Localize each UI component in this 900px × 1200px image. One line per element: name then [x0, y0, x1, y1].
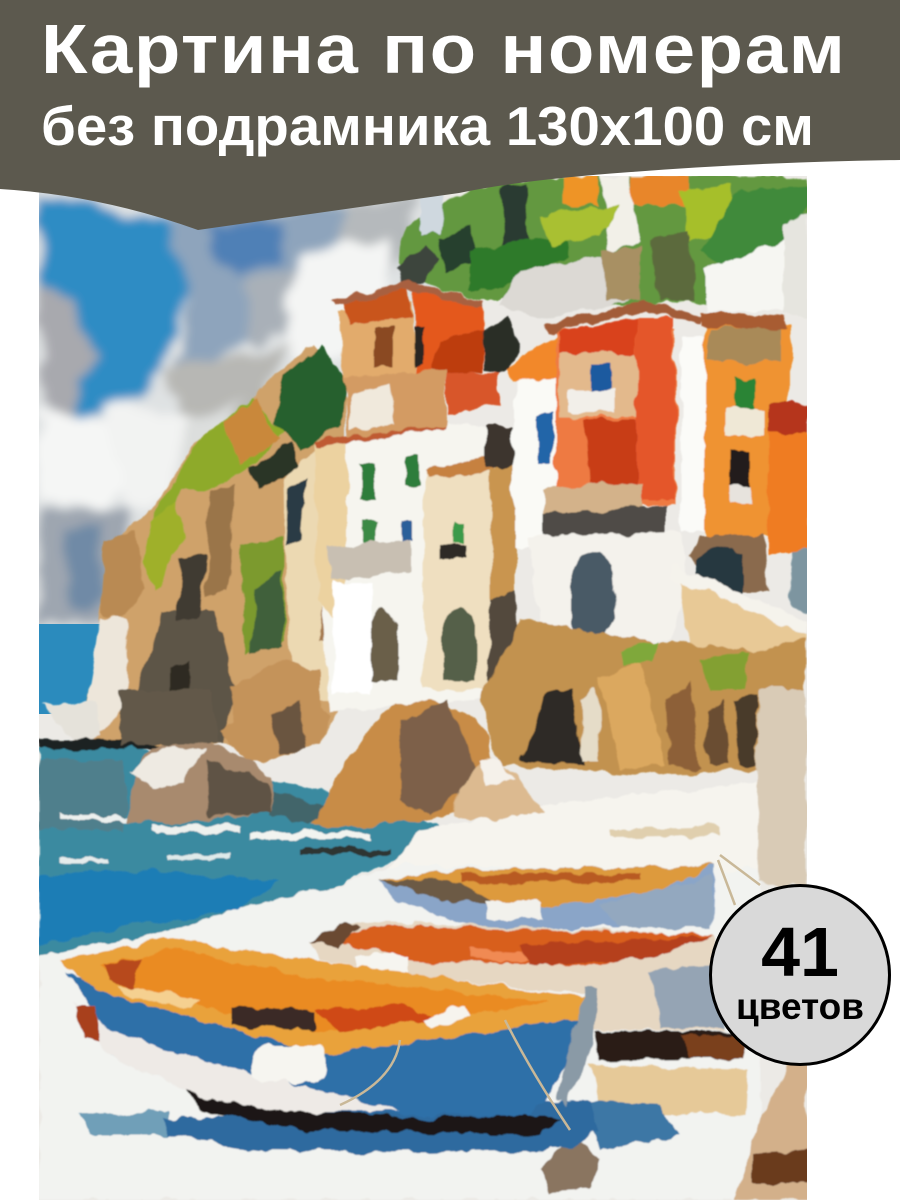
mooring ropes: [340, 855, 760, 1130]
beach: [39, 688, 807, 1200]
text: Картина по номерам: [41, 10, 846, 88]
boat: middle: [308, 921, 742, 1060]
sky: [39, 192, 434, 624]
badge caption: цветов: [736, 986, 864, 1027]
shadow under front boat: [165, 1080, 600, 1152]
distant sea: [39, 624, 100, 714]
boat: front large: [61, 938, 597, 1118]
boat: back: [382, 866, 715, 928]
lower cliff rocks: [40, 620, 807, 775]
badge number: 41: [761, 913, 839, 991]
white buildings: [313, 421, 520, 712]
orange upper tower: [333, 282, 520, 468]
trees at top: [397, 176, 807, 320]
header banner: [0, 0, 900, 230]
badge: 41 colours: [709, 884, 891, 1066]
orange buildings right: [506, 299, 807, 654]
subtitle: без подрамника 130х100 см: [41, 95, 814, 157]
foreground rocks: [127, 700, 542, 826]
sea: [39, 748, 440, 955]
cliff: [80, 343, 345, 750]
